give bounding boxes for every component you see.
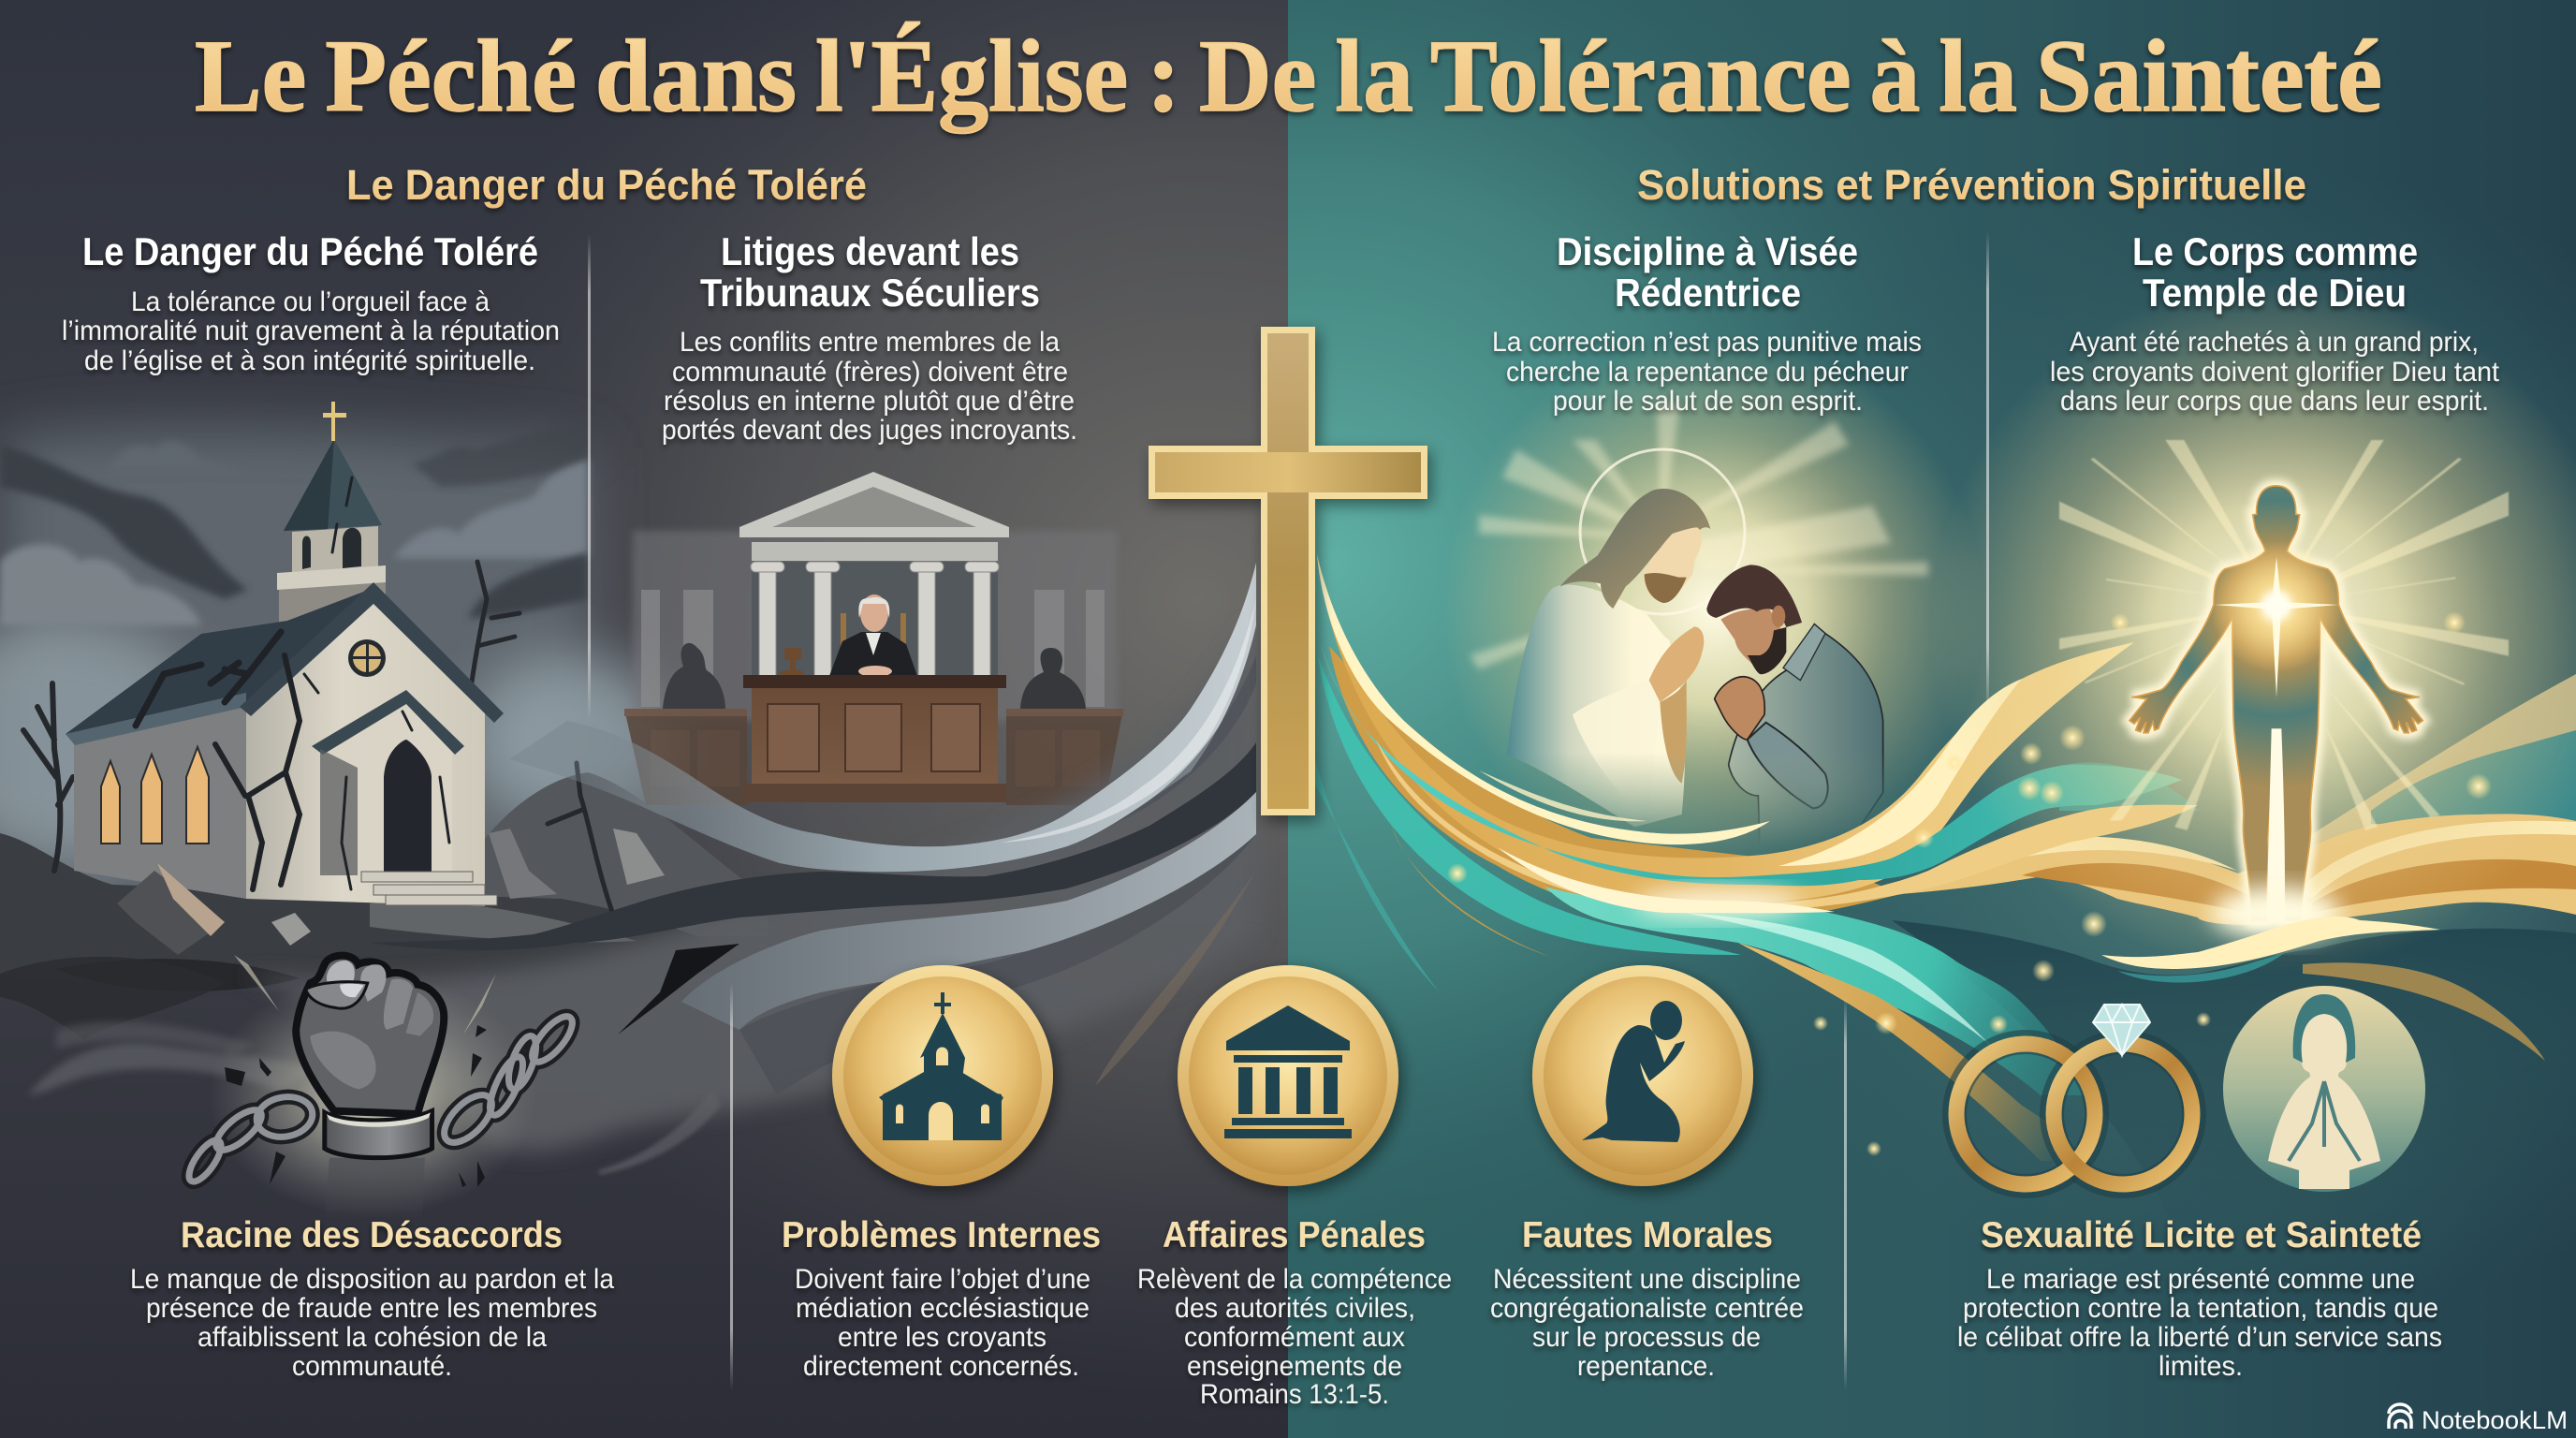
far left streaks bbox=[1310, 740, 1440, 992]
vertical dividers bbox=[588, 231, 1989, 1390]
text block: Le Corps comme Temple de Dieu bbox=[2050, 229, 2500, 417]
NotebookLM logo: NotebookLM bbox=[2422, 1406, 2568, 1434]
text block: Discipline à Visée Rédentrice: pour le salut de son esprit. bbox=[1553, 386, 1863, 417]
sparkles bbox=[1447, 611, 2492, 1156]
text block: Affaires Pénales bbox=[1137, 1215, 1452, 1410]
text block: Sexualité Licite et Sainteté: le célibat offre la liberté d’un service sans bbox=[1957, 1322, 2442, 1353]
divine light bbox=[1442, 337, 1984, 880]
steeple bbox=[277, 402, 386, 637]
medallion: church bbox=[832, 965, 1053, 1186]
text block: Affaires Pénales: conformément aux bbox=[1184, 1322, 1405, 1353]
text block: Le Corps comme Temple de Dieu: Ayant été rachetés à un grand prix, bbox=[2070, 327, 2479, 358]
kneeling man bbox=[1706, 565, 1883, 849]
lower stream gold bbox=[1738, 943, 2106, 1161]
icon: wedding rings bbox=[1954, 1005, 2194, 1186]
text block: Affaires Pénales: Romains 13:1-5. bbox=[1200, 1379, 1389, 1410]
text block: Sexualité Licite et Sainteté: Sexualité Licite et Sainteté bbox=[1981, 1215, 2422, 1255]
cracks bbox=[136, 477, 449, 889]
text block: Affaires Pénales: Relèvent de la compétence bbox=[1137, 1264, 1452, 1295]
hand and shackle bbox=[296, 956, 444, 1217]
text block: Racine des Désaccords: communauté. bbox=[292, 1351, 452, 1382]
text block: Sexualité Licite et Sainteté: Le mariage est présenté comme une bbox=[1986, 1264, 2415, 1295]
icon: kneeling figure bbox=[1582, 1001, 1685, 1142]
text block: Affaires Pénales: des autorités civiles, bbox=[1175, 1293, 1415, 1324]
text block: Sexualité Licite et Sainteté: limites. bbox=[2159, 1351, 2243, 1382]
medallion: kneeling figure bbox=[1532, 965, 1753, 1186]
left chain bbox=[183, 1093, 315, 1186]
text block: Discipline à Visée Rédentrice: Rédentrice bbox=[1615, 271, 1801, 315]
stained windows bbox=[101, 747, 209, 844]
text block: Fautes Morales: congrégationaliste centrée bbox=[1490, 1293, 1804, 1324]
section heading: solutions: Solutions et Prévention Spirituelle bbox=[1637, 161, 2306, 209]
text block: Le Corps comme Temple de Dieu: Temple de Dieu bbox=[2143, 271, 2407, 315]
text block: Le Corps comme Temple de Dieu: Le Corps comme bbox=[2132, 229, 2418, 273]
text block: Le Corps comme Temple de Dieu: dans leur corps que dans leur esprit. bbox=[2060, 386, 2489, 417]
illustration: golden flowing ribbons bbox=[1310, 554, 2576, 1245]
text block: Problèmes Internes: médiation ecclésiastique bbox=[796, 1293, 1090, 1324]
bright ribbon crossing bbox=[1633, 888, 1802, 918]
text block: Problèmes Internes: directement concernés. bbox=[803, 1351, 1079, 1382]
courthouse background wings bbox=[633, 531, 1117, 721]
text block: Problèmes Internes: Doivent faire l’objet d’une bbox=[795, 1264, 1090, 1295]
text block: Sexualité Licite et Sainteté: protection contre la tentation, tandis que bbox=[1963, 1293, 2438, 1324]
silhouette bbox=[2130, 486, 2422, 920]
background: right teal half bbox=[1288, 0, 2576, 1438]
pediment and entablature bbox=[739, 472, 1009, 561]
text block: Litiges devant les Tribunaux Séculiers bbox=[662, 229, 1077, 446]
text block: Fautes Morales: repentance. bbox=[1577, 1351, 1715, 1382]
text block: Le Danger du Péché Toléré: de l’église et à son intégrité spirituelle. bbox=[84, 345, 535, 376]
text block: Litiges devant les Tribunaux Séculiers: Litiges devant les bbox=[721, 229, 1019, 273]
judge bench bbox=[743, 675, 1006, 802]
court benches bbox=[624, 709, 1123, 805]
medallion: courthouse bbox=[1178, 965, 1398, 1186]
lower stream teal bbox=[1544, 887, 2087, 1095]
outer teal rim bbox=[1318, 655, 1741, 955]
text block: Affaires Pénales: enseignements de bbox=[1187, 1351, 1402, 1382]
text block: Racine des Désaccords: Le manque de disposition au pardon et la bbox=[130, 1264, 614, 1295]
dead trees bbox=[23, 562, 618, 927]
title: Le Péché dans l'Église : De la Tolérance à la Sainteté bbox=[195, 19, 2382, 133]
text block: Le Corps comme Temple de Dieu: les croyants doivent glorifier Dieu tant bbox=[2050, 357, 2500, 388]
text block: Fautes Morales: Fautes Morales bbox=[1522, 1215, 1773, 1255]
illustration: cracked church in storm bbox=[0, 402, 768, 1039]
section heading: danger: Le Danger du Péché Toléré bbox=[346, 161, 867, 209]
hills and ground bbox=[0, 772, 768, 1039]
text block: Problèmes Internes bbox=[782, 1215, 1101, 1382]
text block: Problèmes Internes: entre les croyants bbox=[838, 1322, 1046, 1353]
gavel bbox=[780, 648, 804, 676]
illustration: courthouse with judge bbox=[624, 472, 1123, 805]
text block: Fautes Morales: sur le processus de bbox=[1532, 1322, 1761, 1353]
text block: Le Danger du Péché Toléré: La tolérance ou l’orgueil face à bbox=[131, 286, 490, 317]
text block: Litiges devant les Tribunaux Séculiers: portés devant des juges incroyants. bbox=[662, 415, 1077, 446]
text block: Le Danger du Péché Toléré: l’immoralité nuit gravement à la réputation bbox=[62, 315, 560, 346]
columns bbox=[751, 562, 999, 676]
text block: Fautes Morales: Nécessitent une discipline bbox=[1493, 1264, 1801, 1295]
radiant rays bbox=[1930, 281, 2576, 974]
text block: Racine des Désaccords: présence de fraude entre les membres bbox=[146, 1293, 597, 1324]
illustration: Christ and kneeling man bbox=[1455, 348, 1971, 856]
text block: Litiges devant les Tribunaux Séculiers: Les conflits entre membres de la bbox=[680, 327, 1060, 358]
dark teal wave bbox=[1892, 920, 2576, 1245]
icon: diamond bbox=[2093, 1005, 2150, 1055]
icon: NotebookLM mark bbox=[2389, 1404, 2411, 1429]
bronze under-band bbox=[1329, 646, 1900, 923]
text block: Discipline à Visée Rédentrice: Discipline à Visée bbox=[1557, 229, 1858, 273]
golden cross bbox=[1149, 327, 1427, 815]
icon: courthouse bbox=[1224, 1005, 1352, 1138]
cream ribbon highlights bbox=[1317, 554, 1770, 844]
illustration: raised fist breaking chains bbox=[183, 955, 578, 1217]
text block: Litiges devant les Tribunaux Séculiers: communauté (frères) doivent être bbox=[672, 357, 1068, 388]
side figures bbox=[663, 643, 1086, 709]
text block: Fautes Morales bbox=[1490, 1215, 1804, 1382]
medallion: praying celibate figure bbox=[2223, 986, 2425, 1192]
background: left dark half bbox=[0, 0, 1288, 1438]
text block: Le Danger du Péché Toléré: Le Danger du Péché Toléré bbox=[82, 229, 538, 273]
text block: Discipline à Visée Rédentrice bbox=[1492, 229, 1922, 417]
text block: Litiges devant les Tribunaux Séculiers: résolus en interne plutôt que d’être bbox=[664, 386, 1075, 417]
text block: Racine des Désaccords: affaiblissent la cohésion de la bbox=[198, 1322, 547, 1353]
text block: Discipline à Visée Rédentrice: La correction n’est pas punitive mais bbox=[1492, 327, 1922, 358]
text block: Litiges devant les Tribunaux Séculiers: Tribunaux Séculiers bbox=[700, 271, 1040, 315]
Christ figure bbox=[1507, 489, 1710, 827]
text block: Sexualité Licite et Sainteté bbox=[1957, 1215, 2442, 1382]
icon: church bbox=[879, 992, 1003, 1140]
judge bbox=[829, 594, 917, 677]
foot glow and cream rim bbox=[2101, 887, 2545, 1061]
illustration: glowing body as temple bbox=[1930, 281, 2576, 1061]
gold hills bbox=[1835, 674, 2576, 925]
text block: Problèmes Internes: Problèmes Internes bbox=[782, 1215, 1101, 1255]
illustration: grey flowing ribbons bbox=[28, 563, 1256, 1175]
fist glow bbox=[209, 974, 536, 1217]
nave walls and roof bbox=[66, 582, 504, 906]
text block: Affaires Pénales: Affaires Pénales bbox=[1163, 1215, 1426, 1255]
teal ribbon bbox=[1321, 642, 2182, 886]
rubble bbox=[117, 829, 665, 955]
steps bbox=[361, 872, 497, 905]
right chain bbox=[436, 1010, 578, 1151]
text block: Racine des Désaccords: Racine des Désaccords bbox=[181, 1215, 563, 1255]
shards bbox=[225, 1025, 487, 1187]
text block: Racine des Désaccords bbox=[130, 1215, 614, 1382]
gold band under teal bbox=[1376, 740, 2198, 913]
text block: Discipline à Visée Rédentrice: cherche la repentance du pécheur bbox=[1506, 357, 1909, 388]
storm sky bbox=[0, 412, 674, 936]
text block: Le Danger du Péché Toléré bbox=[62, 229, 560, 376]
broad gold band bbox=[1317, 554, 2134, 905]
chest star bbox=[2211, 541, 2342, 697]
